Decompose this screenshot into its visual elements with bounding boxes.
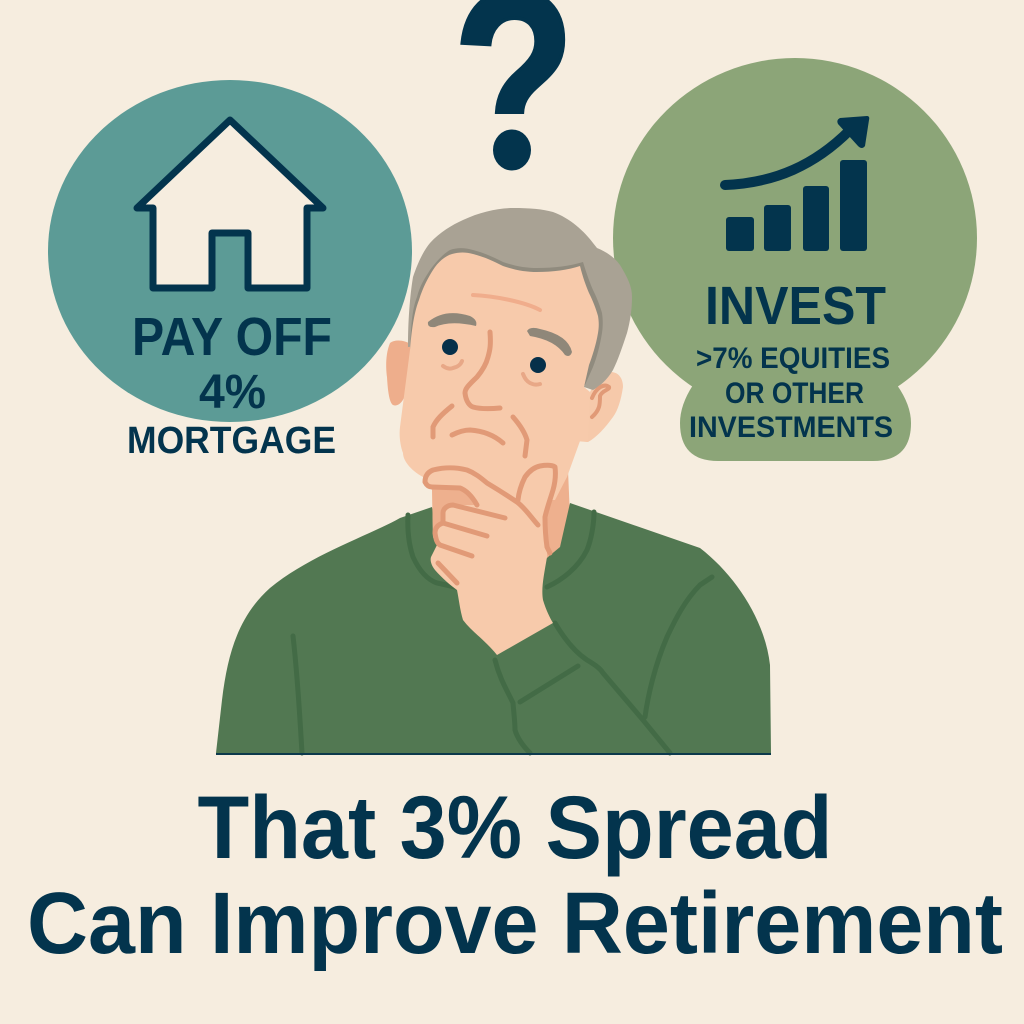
panel: invest xyxy=(613,58,977,461)
icon: rising bar chart with arrow xyxy=(725,116,869,251)
face xyxy=(400,252,599,500)
title line 2: Can Improve Retirement xyxy=(27,875,1003,972)
ear: left xyxy=(386,341,412,405)
hair xyxy=(408,208,632,390)
green lower bubble xyxy=(680,385,911,461)
label: mortgage: MORTGAGE xyxy=(127,420,336,462)
neck xyxy=(432,470,570,560)
eyebrows xyxy=(428,313,572,356)
person thinking xyxy=(216,208,771,755)
panel: pay off mortgage xyxy=(48,80,412,462)
icon: house xyxy=(137,120,323,288)
question mark xyxy=(460,0,566,170)
eyes xyxy=(442,339,546,373)
door opening xyxy=(216,236,244,296)
sweater bottom edge xyxy=(216,753,771,755)
teal circle xyxy=(48,80,412,422)
sweater xyxy=(216,503,771,753)
ear: right xyxy=(575,372,623,442)
sweater seams xyxy=(293,512,712,753)
label: equities: >7% EQUITIES xyxy=(696,342,890,375)
green circle xyxy=(613,58,977,418)
facial lines xyxy=(433,295,540,456)
label: invest: INVEST xyxy=(705,276,886,336)
hand on chin xyxy=(425,465,555,655)
hair shadow xyxy=(410,248,603,385)
label: 4%: 4% xyxy=(199,366,266,419)
title xyxy=(27,777,1003,972)
title line 1: That 3% Spread xyxy=(198,777,832,877)
label: pay off: PAY OFF xyxy=(132,307,332,367)
label: or other: OR OTHER xyxy=(725,377,864,410)
finger lines xyxy=(425,465,555,583)
label: investments: INVESTMENTS xyxy=(689,411,893,444)
ear detail xyxy=(592,386,609,417)
